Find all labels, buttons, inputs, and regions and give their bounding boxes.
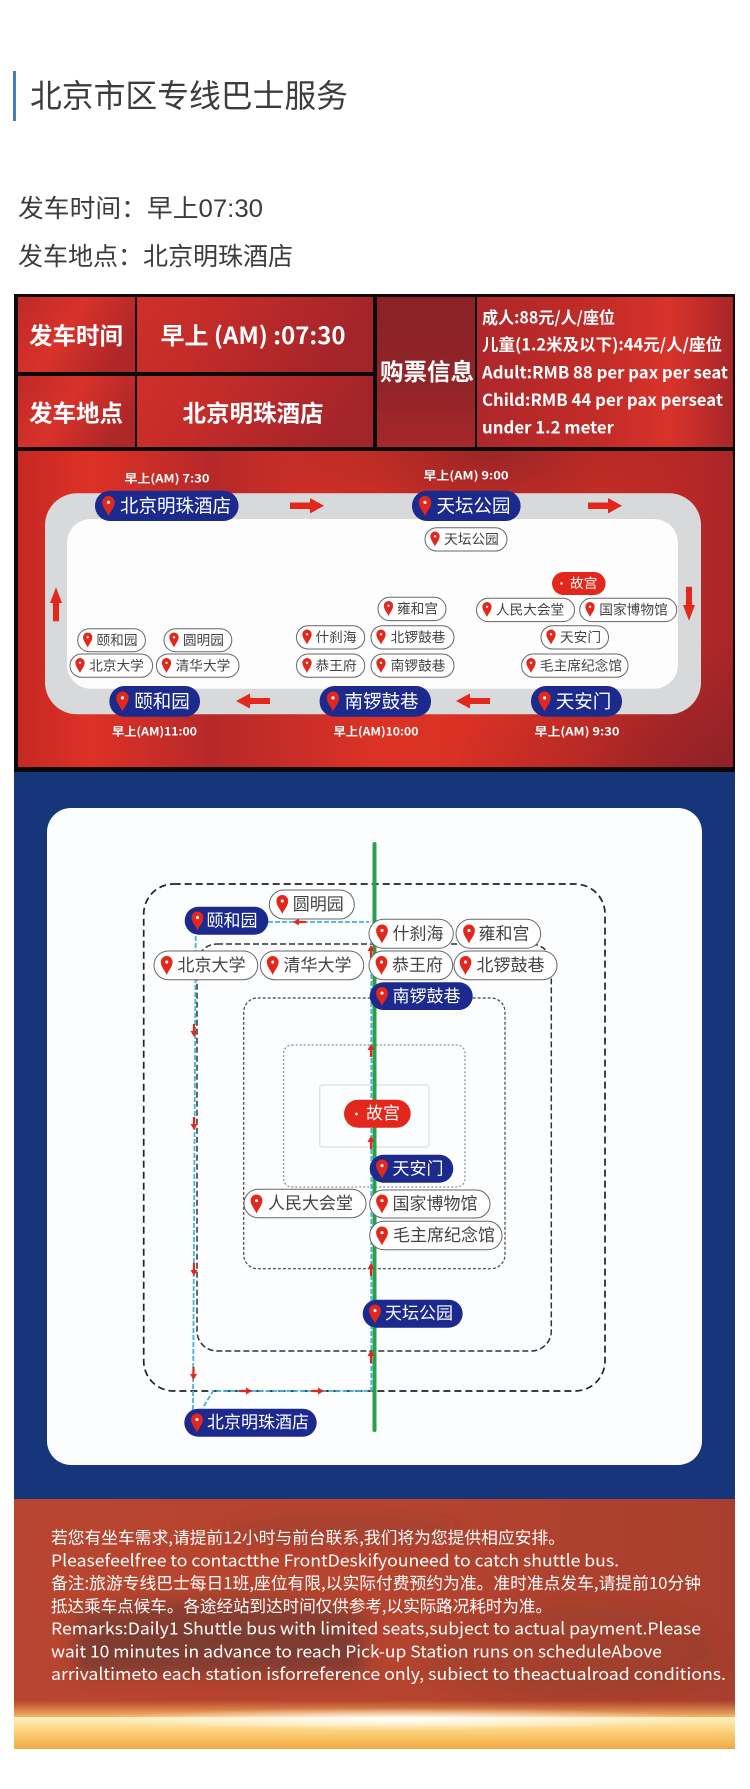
map stop: 北锣鼓巷 bbox=[454, 951, 557, 980]
departure time and place text: 发车地点：北京明珠酒店 bbox=[18, 243, 293, 271]
stop: 天坛公园: 天坛公园 bbox=[436, 496, 511, 516]
departure times: 早上(AM) 9:30 bbox=[534, 723, 620, 739]
departure time and place text bbox=[18, 195, 293, 271]
panel: fare information table: under 1.2 meter bbox=[482, 414, 615, 438]
departure time and place text: 发车时间：早上07:30 bbox=[18, 195, 263, 223]
stop: 颐和园 bbox=[109, 686, 200, 717]
attraction: 人民大会堂: 人民大会堂 bbox=[496, 602, 564, 618]
departure times: 早上(AM) 7:30 bbox=[124, 470, 210, 486]
attraction: 故宫: 故宫 bbox=[570, 576, 597, 591]
attraction: 毛主席纪念馆 bbox=[522, 654, 628, 677]
panel: booking notes: 备注:旅游专线巴士每日1班,座位有限,以实际付费预约为准。准时准点发车,请提前10分钟 bbox=[51, 1570, 701, 1594]
map stop: 颐和园 bbox=[185, 907, 268, 935]
panel: fare information table: 儿童(1.2米及以下):44元/人/座位 bbox=[482, 332, 722, 356]
panel: fare information table: Adult:RMB 88 per pax per seat bbox=[481, 360, 728, 384]
map: direction arrows bbox=[190, 918, 374, 1394]
panel: fare information table: Child:RMB 44 per pax perseat bbox=[482, 387, 723, 411]
map stop: 南锣鼓巷: 南锣鼓巷 bbox=[392, 987, 460, 1006]
map stop: 天坛公园: 天坛公园 bbox=[385, 1304, 453, 1323]
attraction: 什刹海: 什刹海 bbox=[315, 630, 357, 645]
map: ring roads bbox=[144, 884, 605, 1391]
map stop: 恭王府 bbox=[369, 951, 453, 980]
panel: fare information table: 成人:88元/人/座位 bbox=[482, 304, 615, 328]
stop: 天坛公园 bbox=[412, 491, 521, 521]
map stop: 北京明珠酒店: 北京明珠酒店 bbox=[207, 1413, 309, 1432]
map stop: 故宫 bbox=[344, 1100, 411, 1128]
stop: 南锣鼓巷: 南锣鼓巷 bbox=[344, 691, 419, 712]
stop: 北京明珠酒店: 北京明珠酒店 bbox=[120, 496, 231, 516]
panel: booking notes bbox=[14, 1499, 735, 1717]
stop: 天安门 bbox=[531, 686, 622, 717]
attraction: 圆明园: 圆明园 bbox=[183, 633, 224, 648]
attraction: 圆明园 bbox=[164, 629, 232, 652]
map stop: 天安门: 天安门 bbox=[392, 1160, 444, 1178]
attraction: 清华大学 bbox=[156, 654, 239, 677]
map: bus route dashed line bbox=[193, 922, 371, 1410]
map stop: 天安门 bbox=[370, 1155, 453, 1183]
attraction: 国家博物馆: 国家博物馆 bbox=[599, 602, 668, 618]
map stop: 圆明园: 圆明园 bbox=[293, 895, 344, 914]
departure times: 早上(AM)11:00 bbox=[112, 723, 197, 739]
panel: booking notes: arrivaltimeto each station isforreference only, subiect to theactualroad conditions. bbox=[51, 1661, 726, 1685]
attraction: 国家博物馆 bbox=[580, 598, 677, 622]
map stop: 毛主席纪念馆 bbox=[370, 1221, 502, 1250]
map stop: 恭王府: 恭王府 bbox=[392, 956, 443, 975]
title bbox=[13, 71, 348, 121]
map stop: 国家博物馆 bbox=[370, 1190, 490, 1218]
panel: fare information table: 发车地点 bbox=[29, 394, 123, 428]
attraction: 颐和园 bbox=[78, 629, 145, 652]
attraction: 北京大学 bbox=[70, 654, 153, 677]
map stop: 什刹海 bbox=[369, 919, 453, 948]
attraction: 天坛公园: 天坛公园 bbox=[444, 532, 499, 547]
attraction: 什刹海 bbox=[296, 626, 365, 649]
departure times: 早上(AM)10:00 bbox=[334, 723, 419, 739]
attraction: 故宫 bbox=[552, 572, 606, 595]
map stop: 北锣鼓巷: 北锣鼓巷 bbox=[476, 956, 544, 975]
panel: fare information table: 早上 (AM) :07:30 bbox=[160, 317, 346, 351]
map stop: 南锣鼓巷 bbox=[370, 982, 473, 1010]
attraction: 雍和宫: 雍和宫 bbox=[397, 602, 438, 616]
panel: fare information table: 北京明珠酒店 bbox=[182, 394, 324, 428]
panel: map background bbox=[14, 772, 735, 1499]
route direction arrows bbox=[50, 498, 695, 708]
panel: fare information table: 购票信息 bbox=[380, 353, 474, 387]
map stop: 什刹海: 什刹海 bbox=[392, 924, 444, 944]
attraction: 清华大学: 清华大学 bbox=[176, 658, 230, 674]
map stop: 毛主席纪念馆: 毛主席纪念馆 bbox=[393, 1225, 495, 1245]
attraction: 颐和园: 颐和园 bbox=[96, 633, 138, 648]
map stop: 天坛公园 bbox=[363, 1300, 463, 1328]
attraction: 北锣鼓巷 bbox=[371, 626, 454, 649]
attraction: 南锣鼓巷 bbox=[371, 654, 454, 677]
map stop: 清华大学 bbox=[260, 951, 364, 980]
attraction: 毛主席纪念馆: 毛主席纪念馆 bbox=[540, 658, 622, 674]
golden glow footer band bbox=[14, 1700, 735, 1749]
panel: booking notes: 若您有坐车需求,请提前12小时与前台联系,我们将为您提供相应安排。 bbox=[51, 1525, 565, 1549]
map stop: 雍和宫 bbox=[456, 919, 541, 948]
map stop: 雍和宫: 雍和宫 bbox=[478, 924, 530, 944]
map stop: 人民大会堂 bbox=[244, 1189, 366, 1218]
attraction: 天安门: 天安门 bbox=[560, 630, 601, 645]
map stop: 故宫: 故宫 bbox=[366, 1104, 400, 1123]
panel: booking notes: wait 10 minutes in advance to reach Pick-up Station runs on scheduleAbove bbox=[51, 1638, 662, 1662]
map stop: 北京大学 bbox=[154, 951, 258, 980]
attraction: 恭王府: 恭王府 bbox=[315, 658, 357, 674]
attraction: 北锣鼓巷: 北锣鼓巷 bbox=[391, 630, 446, 645]
map stop: 清华大学: 清华大学 bbox=[284, 956, 352, 975]
stop: 天安门: 天安门 bbox=[556, 691, 611, 712]
stop: 颐和园: 颐和园 bbox=[134, 691, 190, 712]
map stop: 北京明珠酒店 bbox=[184, 1409, 317, 1437]
panel: fare information table: 发车时间 bbox=[29, 317, 123, 351]
stop: 北京明珠酒店 bbox=[95, 491, 238, 521]
map stop: 北京大学: 北京大学 bbox=[178, 956, 246, 975]
attraction: 南锣鼓巷: 南锣鼓巷 bbox=[391, 658, 446, 674]
departure times: 早上(AM) 9:00 bbox=[424, 467, 509, 483]
panel: fare information table bbox=[14, 294, 735, 772]
panel: booking notes: Remarks:Daily1 Shuttle bus with limited seats,subject to actual payment.Please bbox=[51, 1616, 701, 1640]
map stop: 颐和园: 颐和园 bbox=[206, 912, 258, 930]
panel: booking notes: Pleasefeelfree to contactthe FrontDeskifyouneed to catch shuttle bus. bbox=[51, 1547, 619, 1571]
panel: route timeline bbox=[18, 451, 733, 767]
panel: booking notes: 抵达乘车点候车。各途经站到达时间仅供参考,以实际路况耗时为准。 bbox=[51, 1593, 552, 1617]
attraction: 天坛公园 bbox=[425, 528, 507, 551]
attraction: 恭王府 bbox=[296, 654, 365, 677]
title: 北京市区专线巴士服务 bbox=[30, 78, 348, 114]
map: green metro line bbox=[372, 844, 376, 1430]
departure times bbox=[112, 467, 620, 739]
map stop: 人民大会堂: 人民大会堂 bbox=[268, 1194, 353, 1213]
map stop: 圆明园 bbox=[269, 890, 354, 919]
stop: 南锣鼓巷 bbox=[320, 686, 431, 717]
map stop: 国家博物馆: 国家博物馆 bbox=[392, 1194, 478, 1214]
attraction: 人民大会堂 bbox=[476, 598, 574, 622]
attraction: 雍和宫 bbox=[378, 597, 446, 621]
attraction: 天安门 bbox=[541, 626, 608, 649]
attraction: 北京大学: 北京大学 bbox=[89, 658, 144, 674]
